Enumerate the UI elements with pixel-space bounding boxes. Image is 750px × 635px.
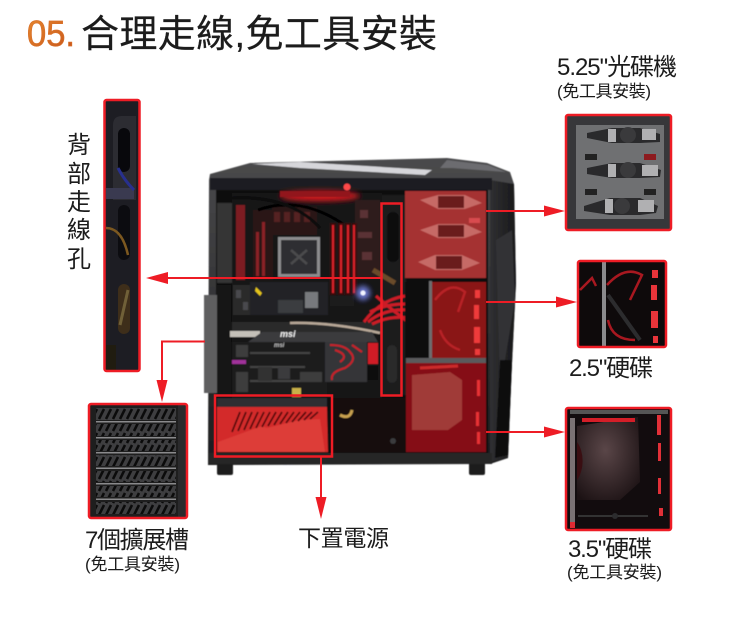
- arrow: to expansion slots: [156, 342, 205, 402]
- interior: [216, 190, 488, 453]
- case shell: [208, 158, 516, 465]
- section number: 05.: [27, 13, 75, 54]
- label: 5.25 bay: 5.25"光碟機: [557, 54, 677, 81]
- drive bay 5.25 overlay: [405, 191, 486, 278]
- feet: [217, 462, 485, 475]
- highlight box: cable holes: [382, 204, 402, 396]
- arrow: to 3.5 inch bay: [486, 426, 565, 438]
- label: 5.25 bay: (免工具安裝): [557, 82, 651, 101]
- thumbnail: 3.5 inch bay: [566, 408, 671, 530]
- label: 2.5 bay: 2.5"硬碟: [569, 355, 653, 382]
- title: [27, 13, 437, 56]
- cable routing panel: [382, 195, 406, 395]
- motherboard: msi: [280, 329, 296, 339]
- label: rear cable holes: 部: [67, 161, 91, 188]
- drive bay lower overlay: [406, 358, 486, 452]
- label: expansion slots: 7個擴展槽: [85, 527, 189, 554]
- motherboard: [230, 184, 382, 398]
- label: rear cable holes: [67, 132, 91, 273]
- graphics card: [232, 322, 382, 334]
- lid highlights: [252, 162, 432, 175]
- red cables: [364, 296, 410, 324]
- label: rear cable holes: 走: [67, 189, 91, 216]
- label: expansion slots: [85, 527, 189, 574]
- lower cavity: [332, 398, 406, 452]
- red lighting: [280, 191, 360, 201]
- label: rear cable holes: 線: [67, 217, 91, 244]
- rear bracket: [204, 295, 217, 393]
- label: 3.5 bay: [567, 536, 662, 582]
- psu cover: [217, 398, 328, 452]
- arrow: to 5.25 inch bay: [486, 206, 565, 216]
- arrow: to rear cable holes: [146, 272, 381, 284]
- label: rear cable holes: 背: [67, 132, 91, 159]
- arrow: to power supply label: [316, 456, 326, 519]
- memory: [330, 223, 357, 295]
- label: expansion slots: (免工具安裝): [85, 555, 180, 574]
- label: 5.25 bay: [557, 54, 677, 101]
- label: 3.5 bay: 3.5"硬碟: [568, 536, 652, 563]
- label: 3.5 bay: (免工具安裝): [567, 563, 662, 582]
- thumbnail: 5.25 inch bay: [566, 115, 671, 230]
- thumbnail: expansion slots: [89, 404, 187, 518]
- cpu water block: [278, 237, 320, 277]
- PC case photo: [204, 158, 516, 475]
- thumbnail: 2.5 inch bay: [578, 261, 666, 347]
- label: rear cable holes: 孔: [67, 246, 91, 273]
- label: bottom power supply: 下置電源: [298, 525, 389, 551]
- motherboard: msi: [274, 343, 285, 349]
- title text: 合理走線,免工具安裝: [81, 14, 437, 56]
- thumbnail: rear cable holes: [104, 100, 140, 371]
- drive bay 3.5 top overlay: [405, 281, 486, 359]
- blue led: [356, 286, 370, 300]
- dragon shield: [325, 342, 367, 382]
- arrow: to 2.5 inch bay: [486, 296, 577, 308]
- highlight box: power supply: [215, 396, 332, 456]
